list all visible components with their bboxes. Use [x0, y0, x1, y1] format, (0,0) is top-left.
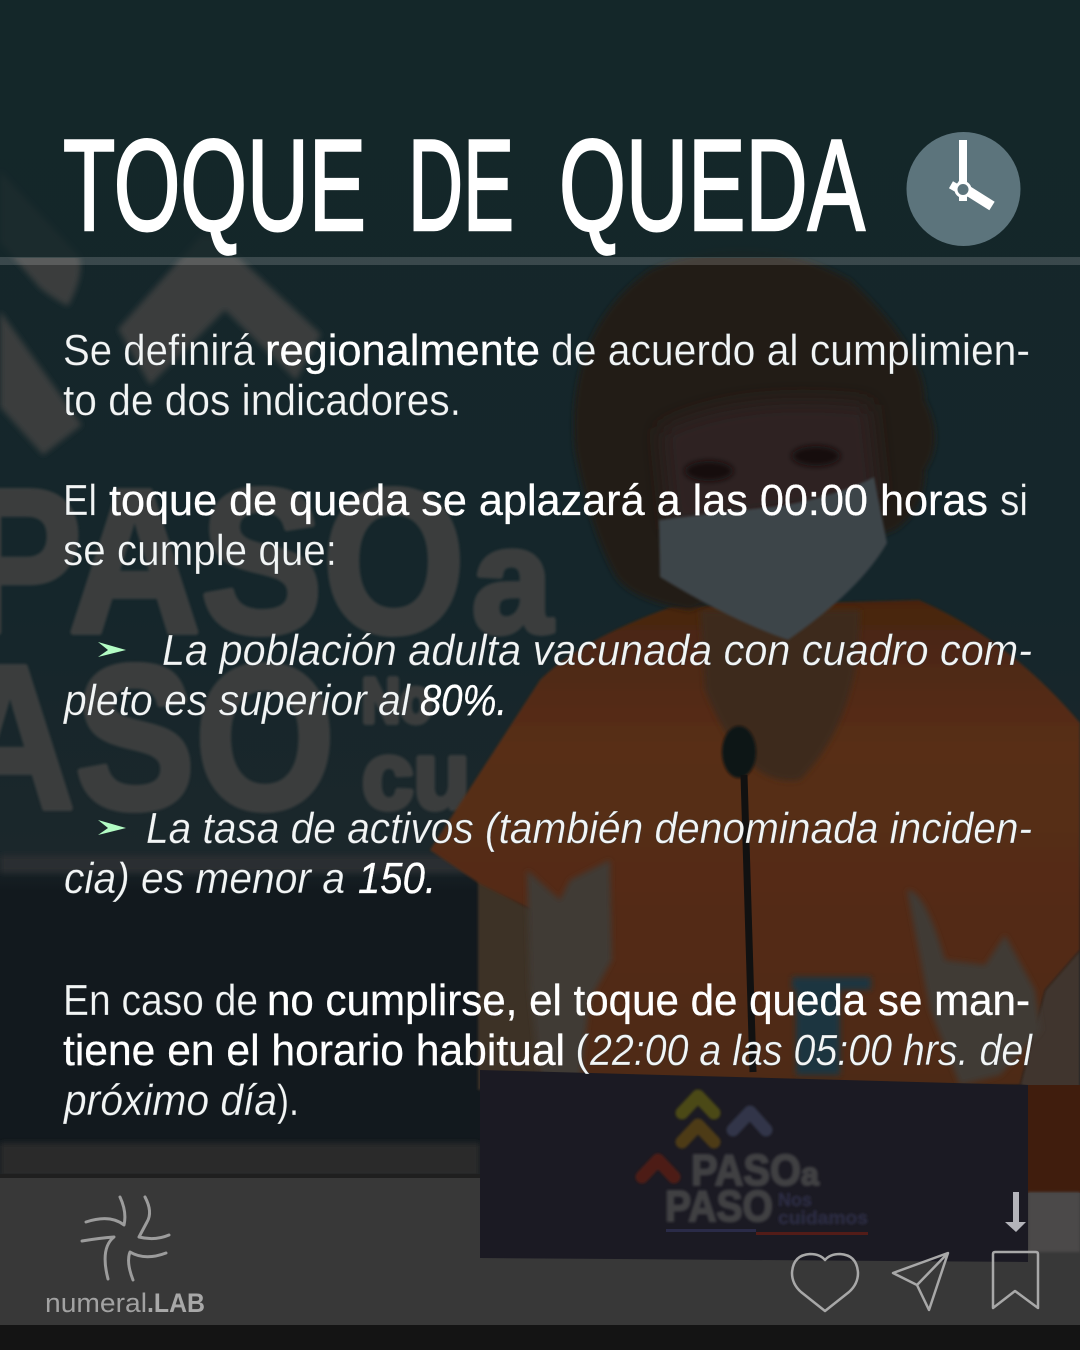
person: shirt	[430, 600, 1080, 1085]
bullet: vaccination: pleto es superior al	[62, 676, 411, 725]
title: DE	[408, 112, 514, 258]
person: hair	[574, 250, 935, 610]
text block: definition: Se definirá	[63, 326, 255, 375]
icon: green arrow bullet	[98, 642, 126, 657]
darker title band overlay	[0, 0, 1080, 258]
text block: condition: si	[1000, 476, 1028, 525]
text block: condition: se cumple que:	[63, 526, 337, 575]
bullet: active rate: La tasa de activos (también denominada inciden-	[146, 804, 1032, 853]
backdrop lettering: a	[472, 496, 553, 664]
text block: condition: El	[63, 476, 97, 525]
desk sign: Nos	[778, 1190, 812, 1210]
backdrop lettering: cu	[362, 723, 470, 829]
bullet: active rate: cia) es menor a	[64, 854, 345, 903]
desk sign: cuidamos	[778, 1208, 868, 1228]
icon: down arrow	[1005, 1192, 1026, 1232]
backdrop lettering	[0, 447, 553, 852]
text block: otherwise: tiene en el horario habitual	[63, 1026, 565, 1075]
logo: numeral.LAB	[45, 1197, 205, 1318]
person: hands	[527, 860, 1041, 1085]
microphone	[722, 726, 756, 1072]
bullet: vaccination: La población adulta vacunada con cuadro com-	[162, 626, 1032, 675]
desk sign: a	[801, 1156, 819, 1192]
text block: definition: to de dos indicadores.	[63, 376, 461, 425]
text block: otherwise: En caso de	[63, 976, 258, 1025]
lower wall strips	[0, 855, 480, 873]
table	[0, 1177, 1080, 1327]
logo: numeral.LAB: .LAB	[147, 1288, 205, 1318]
text block: otherwise: 22:00 a las 05:00 hrs. del	[589, 1026, 1033, 1075]
water bottle	[792, 977, 871, 1075]
icon: clock	[906, 132, 1020, 246]
text block: otherwise: no cumplirse, el toque de queda se man-	[267, 976, 1030, 1025]
desk sign	[480, 1070, 1028, 1262]
text block: definition: regionalmente	[265, 326, 540, 375]
person: arms	[478, 880, 540, 1090]
bullet: vaccination	[62, 626, 1032, 725]
text block: definition	[63, 326, 1030, 425]
icon: paper plane	[893, 1253, 948, 1310]
divider under title	[0, 257, 1080, 265]
bullet: active rate: 150.	[358, 854, 436, 903]
icon: heart	[792, 1254, 858, 1311]
text block: condition	[63, 476, 1028, 575]
person: mask	[659, 477, 887, 640]
title: QUEDA	[559, 112, 865, 258]
backdrop logo chevrons	[0, 171, 321, 455]
text block: otherwise	[62, 976, 1033, 1125]
bullet: active rate	[64, 804, 1032, 903]
backdrop lettering: No	[362, 667, 432, 736]
person: neck	[700, 610, 860, 781]
title: TOQUE	[63, 112, 366, 258]
text block: condition: toque de queda se aplazará a las 00:00 horas	[109, 476, 988, 525]
icon: bookmark	[993, 1252, 1038, 1308]
person: face	[660, 401, 880, 530]
person: eyes	[685, 446, 840, 481]
text block: definition: de acuerdo al cumplimien-	[551, 326, 1030, 375]
icon: green arrow bullet	[98, 820, 126, 835]
text block: otherwise: (	[575, 1026, 590, 1075]
bullet: vaccination: 80%.	[420, 676, 507, 725]
title	[63, 112, 865, 258]
desk sign: PASO	[665, 1182, 773, 1231]
text block: otherwise: ).	[277, 1076, 299, 1125]
logo: numeral.LAB: numeral	[45, 1288, 147, 1318]
desk sign: PASO	[691, 1146, 801, 1195]
text block: otherwise: próximo día	[62, 1076, 277, 1125]
